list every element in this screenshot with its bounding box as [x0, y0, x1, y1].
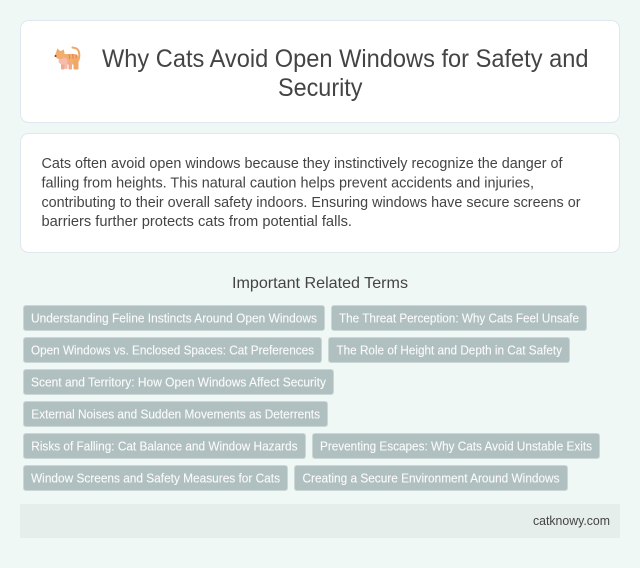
tag: Preventing Escapes: Why Cats Avoid Unstable Exits [320, 438, 592, 453]
text block: paragraph: falling from heights. This natural caution helps prevent accidents and injuries, [42, 174, 534, 192]
footer: catknowy.com [533, 513, 610, 528]
title: Why Cats Avoid Open Windows for Safety and [102, 45, 588, 73]
text block: paragraph: Cats often avoid open windows because they instinctively recognize the danger of [42, 155, 563, 172]
tag list [24, 306, 600, 490]
tag: Understanding Feline Instincts Around Open Windows [31, 310, 317, 325]
tag: Scent and Territory: How Open Windows Affect Security [31, 374, 327, 389]
text block: paragraph: barriers further protects cats from potential falls. [42, 213, 352, 230]
heading: related terms: Important Related Terms [232, 275, 408, 292]
tag [294, 466, 568, 490]
tag [24, 370, 334, 394]
tag [24, 434, 306, 458]
tag [332, 306, 586, 330]
tag [24, 306, 324, 330]
tag: Open Windows vs. Enclosed Spaces: Cat Preferences [31, 342, 314, 357]
panel: title card [20, 20, 620, 122]
text block: paragraph: contributing to their overall safety indoors. Ensuring windows have secure screens or [42, 194, 580, 211]
icon: orange cat [54, 48, 79, 70]
text block: paragraph [42, 155, 580, 230]
title: Security [278, 74, 363, 102]
tag: Risks of Falling: Cat Balance and Window Hazards [31, 438, 298, 453]
tag: The Role of Height and Depth in Cat Safety [336, 342, 563, 357]
footer [20, 504, 620, 538]
tag [24, 466, 288, 490]
tag: Creating a Secure Environment Around Windows [302, 470, 560, 485]
tag [328, 338, 570, 362]
panel: intro paragraph [20, 134, 620, 252]
tag [24, 402, 328, 426]
tag: External Noises and Sudden Movements as Deterrents [31, 406, 320, 421]
tag [312, 434, 600, 458]
tag: The Threat Perception: Why Cats Feel Unsafe [339, 310, 579, 325]
tag: Window Screens and Safety Measures for Cats [31, 470, 280, 485]
title [102, 45, 588, 102]
tag [24, 338, 322, 362]
